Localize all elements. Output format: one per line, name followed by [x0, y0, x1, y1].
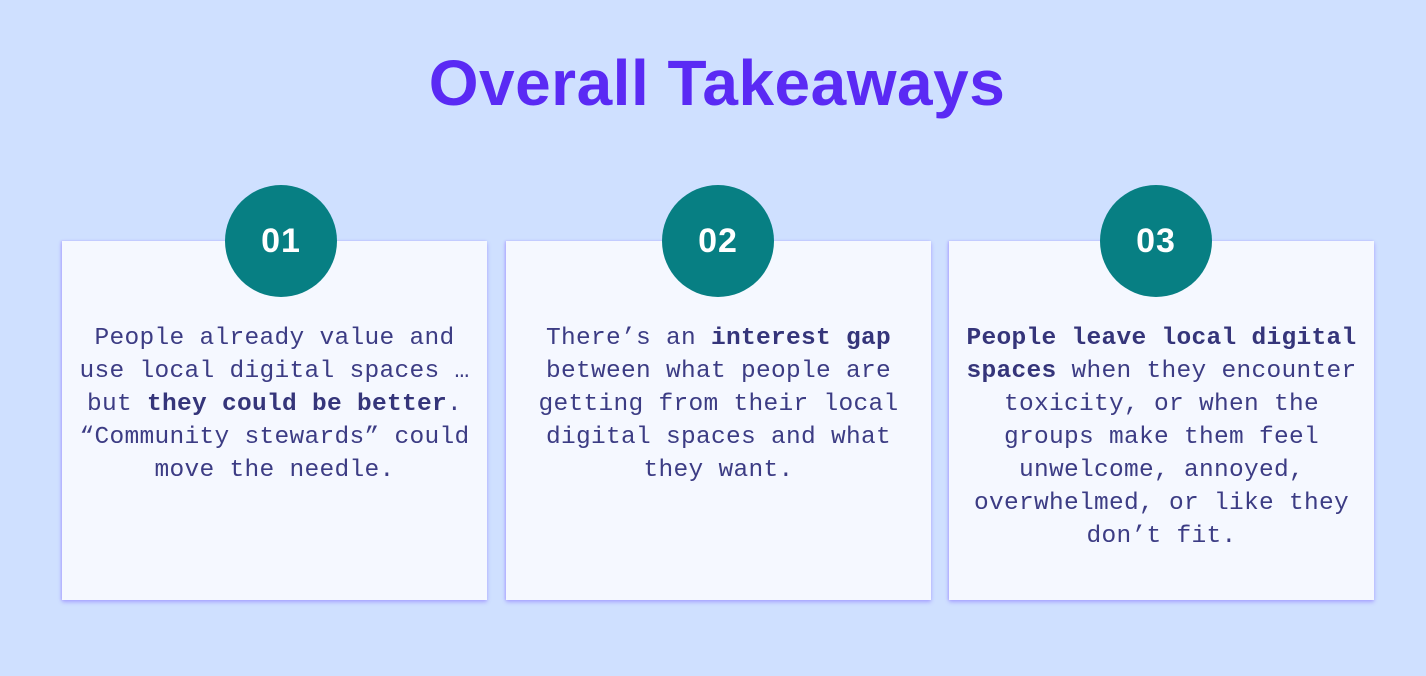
badge 02: 02 [698, 222, 738, 260]
panel: takeaway 2 [506, 241, 931, 600]
text: takeaway 2: digital spaces and what [546, 424, 891, 451]
text: takeaway 1: but they could be better. [87, 391, 462, 418]
text: takeaway 2: There’s an interest gap [546, 325, 891, 352]
text: takeaway 3: groups make them feel [1004, 424, 1319, 451]
text: takeaway 3: toxicity, or when the [1004, 391, 1319, 418]
text: takeaway 2: between what people are [546, 358, 891, 385]
text: takeaway 3: People leave local digital [966, 325, 1357, 352]
badge 01: 01 [261, 222, 301, 260]
text: takeaway 3: unwelcome, annoyed, [1019, 457, 1304, 484]
text: takeaway 2: they want. [643, 457, 794, 484]
text: takeaway 2 [538, 325, 899, 484]
text: takeaway 1: People already value and [94, 325, 455, 352]
title: Overall Takeaways [429, 47, 1005, 119]
text: takeaway 1: “Community stewards” could [79, 424, 470, 451]
text: takeaway 3: overwhelmed, or like they [974, 490, 1349, 517]
text: takeaway 2: getting from their local [538, 391, 899, 418]
badge 02 [662, 185, 774, 297]
text: takeaway 3: spaces when they encounter [966, 358, 1357, 385]
text: takeaway 3 [966, 325, 1357, 550]
text: takeaway 1: use local digital spaces … [79, 358, 470, 385]
text: takeaway 1: move the needle. [154, 457, 395, 484]
panel: takeaway 3 [949, 241, 1374, 600]
panel: takeaway 1 [62, 241, 487, 600]
badge 01 [225, 185, 337, 297]
badge 03: 03 [1136, 222, 1176, 260]
text: takeaway 1 [79, 325, 470, 484]
badge 03 [1100, 185, 1212, 297]
text: takeaway 3: don’t fit. [1086, 523, 1237, 550]
